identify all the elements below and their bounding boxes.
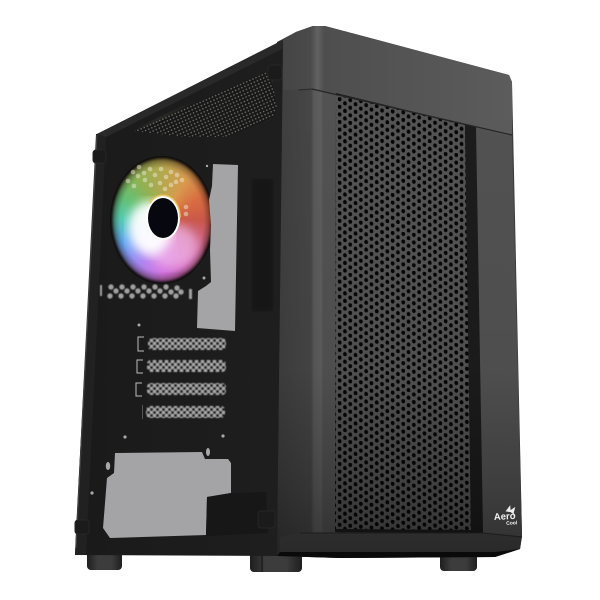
perforated mesh bbox=[335, 95, 471, 530]
panel: front of case bbox=[277, 26, 522, 558]
silver rear panel opening bbox=[197, 164, 238, 331]
bottom base bbox=[280, 533, 522, 553]
psu opening bbox=[103, 452, 231, 538]
mesh recess bbox=[335, 93, 483, 533]
logo: Aero bbox=[494, 511, 516, 523]
thumbscrews bbox=[75, 65, 282, 534]
fan perforation bbox=[126, 165, 188, 216]
small mounting holes bbox=[90, 165, 225, 535]
logo bbox=[493, 505, 518, 527]
illustration: PC case bbox=[74, 26, 522, 572]
cable cutout bbox=[253, 180, 272, 310]
fan glow bbox=[146, 224, 198, 268]
glass left frame bbox=[75, 134, 106, 555]
fan bbox=[100, 147, 224, 291]
shading bbox=[277, 26, 522, 558]
top band bbox=[283, 26, 512, 135]
fan hub bbox=[146, 195, 180, 240]
right front strip bbox=[475, 126, 522, 537]
logo: Cool bbox=[506, 520, 518, 527]
top edge bbox=[97, 40, 283, 137]
panel: tempered glass side bbox=[75, 40, 283, 556]
rear vent holes bbox=[100, 284, 192, 299]
front left pillar bbox=[277, 26, 337, 556]
feet bbox=[87, 550, 477, 572]
top vent bbox=[133, 70, 277, 137]
expansion slots bbox=[136, 337, 226, 419]
psu bracket bbox=[206, 492, 268, 536]
